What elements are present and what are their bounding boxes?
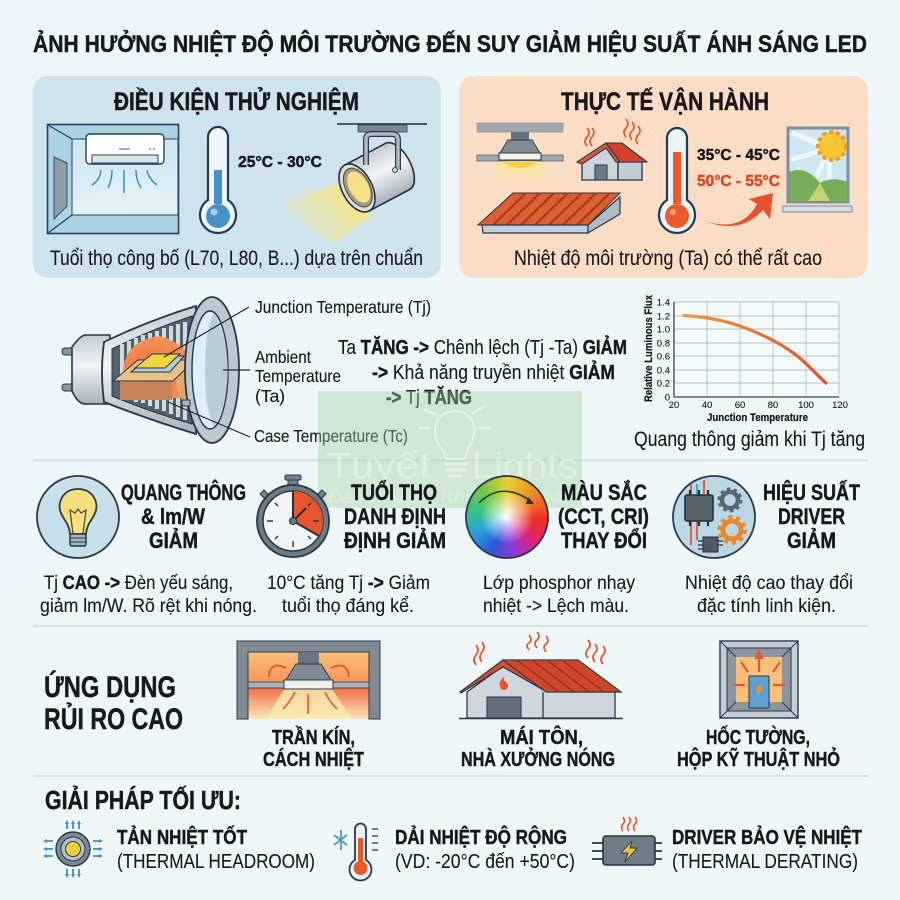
icon: recessed ceiling light xyxy=(477,123,563,188)
text: good heat dissipation: (THERMAL HEADROOM) xyxy=(117,850,315,873)
chart: relative luminous flux vs junction temperature: 0.4 xyxy=(657,366,670,376)
chart: relative luminous flux vs junction temperature: 0.8 xyxy=(657,338,670,350)
panel: real operation xyxy=(459,76,868,278)
temperature range 35-45: 35°C - 45°C xyxy=(697,147,780,164)
heading: color: MÀU SẮC xyxy=(561,480,647,505)
icon: driver chip and gears xyxy=(673,476,755,558)
text: driver note: đặc tính linh kiện. xyxy=(697,595,836,617)
icon: closed ceiling xyxy=(237,641,380,719)
text: color note: Lớp phosphor nhạy xyxy=(483,572,635,594)
caption: wall niche: HỘP KỸ THUẬT NHỎ xyxy=(677,747,840,771)
heading: driver efficiency: DRIVER xyxy=(778,504,845,529)
heading: driver efficiency xyxy=(763,480,860,553)
text: driver thermal protection xyxy=(672,825,862,873)
chart: relative luminous flux vs junction temperature: 0.2 xyxy=(657,378,670,390)
caption: closed ceiling: TRẦN KÍN, xyxy=(272,726,355,749)
icon: heat sink xyxy=(43,820,103,878)
caption: factory roof: MÁI TÔN, xyxy=(500,725,583,749)
watermark: Tuyết Lights: Tuyết xyxy=(326,445,431,486)
icon: corrugated metal roof xyxy=(478,193,620,233)
heading: optimal solutions: GIẢI PHÁP TỐI ƯU: xyxy=(45,785,241,815)
icon: air-conditioned room xyxy=(48,124,178,234)
icon: house with heat xyxy=(577,119,647,180)
heading: rated lifetime: TUỔI THỌ xyxy=(351,480,437,505)
watermark: Tuyết Lights: Lights xyxy=(472,445,578,486)
watermark: Tuyết Lights: Đèn Chuẩn - Không giá chát xyxy=(328,489,569,505)
text: lifetime note: 10°C tăng Tj -> Giảm xyxy=(267,572,430,594)
icon: sunny window xyxy=(783,128,852,212)
diagram: LED bulb cutaway xyxy=(62,297,250,443)
chart: relative luminous flux vs junction temperature: 120 xyxy=(832,400,848,411)
heading: test conditions: ĐIỀU KIỆN THỬ NGHIỆM xyxy=(114,86,359,116)
caption: real operation: Nhiệt độ môi trường (Ta) có thể rất cao xyxy=(514,247,822,270)
icon: wide range thermometer xyxy=(334,824,378,881)
text: color note: nhiệt -> Lệch màu. xyxy=(483,595,629,617)
heading: color: THAY ĐỔI xyxy=(561,528,647,553)
text: lifetime note: tuổi thọ đáng kể. xyxy=(282,595,414,617)
label: ambient temperature: Ambient xyxy=(255,347,311,367)
heading: luminous flux xyxy=(121,480,246,553)
text: driver note: Nhiệt độ cao thay đổi xyxy=(685,572,853,594)
caption: closed ceiling xyxy=(263,726,364,771)
arrow: to hot window xyxy=(705,193,773,226)
text: cause chain: -> Tj TĂNG xyxy=(386,386,472,409)
heading: driver efficiency: GIẢM xyxy=(787,528,836,553)
watermark: Tuyết Lights xyxy=(318,391,582,508)
text: wide temperature range xyxy=(395,825,575,873)
text: cause chain: Ta TĂNG -> Chênh lệch (Tj -Ta) GIẢM xyxy=(338,336,627,359)
text: luminous flux note xyxy=(40,572,257,617)
heading: rated lifetime: DANH ĐỊNH xyxy=(344,504,446,529)
chart: relative luminous flux vs junction temperature: 100 xyxy=(798,400,814,411)
chart: relative luminous flux vs junction temperature: 1.0 xyxy=(657,324,670,336)
chart: relative luminous flux vs junction temperature: 1.2 xyxy=(657,312,670,322)
heading: high risk applications xyxy=(44,670,183,736)
chart: relative luminous flux vs junction temperature: 40 xyxy=(702,400,712,411)
heading: high risk applications: ỨNG DỤNG xyxy=(44,670,176,704)
chart: relative luminous flux vs junction temperature: 0.6 xyxy=(657,352,670,362)
heading: driver efficiency: HIỆU SUẤT xyxy=(763,480,860,505)
caption: closed ceiling: CÁCH NHIỆT xyxy=(263,747,364,771)
text: wide temperature range: (VD: -20°C đến +50°C) xyxy=(395,850,575,873)
label: ambient temperature: (Ta) xyxy=(255,386,285,406)
text: driver note xyxy=(685,572,853,617)
text: driver thermal protection: (THERMAL DERATING) xyxy=(672,850,858,873)
label: junction temperature: Junction Temperature (Tj) xyxy=(255,297,431,317)
text: wide temperature range: DẢI NHIỆT ĐỘ RỘNG xyxy=(395,825,567,849)
icon: light bulb xyxy=(37,476,119,558)
text: color note xyxy=(483,572,635,617)
heading: color: (CCT, CRI) xyxy=(558,504,649,529)
text: good heat dissipation: TẢN NHIỆT TỐT xyxy=(117,825,247,849)
chart: relative luminous flux vs junction temperature: 1.4 xyxy=(657,298,670,308)
temperature range 25-30: 25°C - 30°C xyxy=(238,154,322,171)
chart: relative luminous flux vs junction temperature: Junction Temperature xyxy=(707,412,808,424)
icon: thermal protection driver xyxy=(592,817,662,865)
temperature range 50-55: 50°C - 55°C xyxy=(697,173,780,190)
icon: blue thermometer xyxy=(200,127,236,233)
caption: factory roof xyxy=(461,725,615,771)
heading: rated lifetime: ĐỊNH GIẢM xyxy=(344,528,446,553)
chart: relative luminous flux vs junction temperature: 60 xyxy=(735,400,745,411)
heading: luminous flux: GIẢM xyxy=(149,528,198,553)
icon: stopwatch xyxy=(257,475,329,557)
text: cause chain xyxy=(338,336,627,409)
heading: high risk applications: RỦI RO CAO xyxy=(44,702,183,736)
chart: relative luminous flux vs junction temperature: 20 xyxy=(669,400,679,411)
text: luminous flux note: giảm lm/W. Rõ rệt khi nóng. xyxy=(40,595,257,617)
chart: relative luminous flux vs junction temperature xyxy=(643,294,848,424)
chart: relative luminous flux vs junction temperature: 0 xyxy=(665,392,670,404)
text: luminous flux note: Tj CAO -> Đèn yếu sáng, xyxy=(44,572,233,594)
heading: rated lifetime xyxy=(344,480,446,553)
caption: wall niche xyxy=(677,725,840,771)
text: driver thermal protection: DRIVER BẢO VỆ NHIỆT xyxy=(672,825,862,849)
heading: luminous flux: & lm/W xyxy=(141,504,205,529)
text: good heat dissipation xyxy=(117,825,315,873)
icon: factory with metal roof xyxy=(459,632,623,718)
icon: hot thermometer xyxy=(659,128,695,233)
heading: real operation: THỰC TẾ VẬN HÀNH xyxy=(561,86,769,116)
heading: luminous flux: QUANG THÔNG xyxy=(121,480,246,505)
icon: wall niche xyxy=(720,641,798,718)
heading: color xyxy=(558,480,649,553)
label: ambient temperature: Temperature xyxy=(255,366,341,386)
chart: relative luminous flux vs junction temperature: 80 xyxy=(768,400,778,411)
caption: test conditions: Tuổi thọ công bố (L70, L80, B...) dựa trên chuẩn xyxy=(50,247,423,270)
label: case temperature: Case Temperature (Tc) xyxy=(254,426,408,446)
icon: color wheel xyxy=(466,476,548,558)
chart: relative luminous flux vs junction temperature: Relative Luminous Flux xyxy=(643,294,655,402)
text: lifetime note xyxy=(267,572,430,617)
caption: factory roof: NHÀ XƯỞNG NÓNG xyxy=(461,747,615,771)
icon: track spotlight xyxy=(278,124,427,245)
caption: wall niche: HỐC TƯỜNG, xyxy=(706,725,810,749)
panel: test conditions xyxy=(33,76,441,278)
text: cause chain: -> Khả năng truyền nhiệt GIẢM xyxy=(372,361,615,384)
